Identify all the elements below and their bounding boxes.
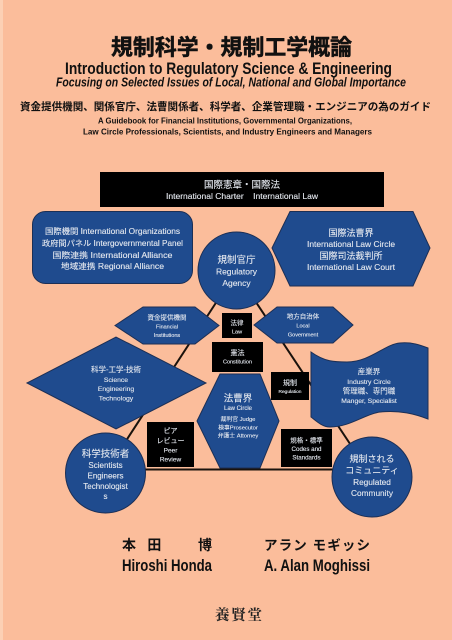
- panel: international charter: 国際憲章・国際法: [204, 179, 280, 191]
- box: regulation: 規制: [283, 378, 297, 387]
- circle: scientists: s: [104, 492, 108, 501]
- circle: regulatory agency: Regulatory: [216, 266, 258, 276]
- connecting triangle lines: [105, 272, 372, 477]
- flag: industry circle: Industry Circle: [347, 379, 391, 386]
- flag: industry circle: 産業界: [358, 366, 381, 376]
- circle: regulated community: Regulated: [353, 477, 391, 487]
- diamond: science engineering technology: [27, 337, 206, 429]
- hexagon: law circle: 検事Prosecutor: [218, 424, 258, 432]
- box: law: 法律: [230, 318, 244, 327]
- author: Hiroshi Honda: 本田 博: [122, 537, 212, 553]
- hexagon: law circle: [197, 374, 279, 468]
- box: codes and standards: Standards: [292, 454, 321, 462]
- publisher: 養賢堂: [215, 606, 262, 624]
- panel: international law circle: International Law Court: [307, 262, 396, 272]
- hexagon: financial institutions: Institutions: [154, 333, 180, 339]
- diamond: science engineering technology: 科学-工学-技術: [91, 364, 141, 374]
- hexagon: local government: Local: [296, 324, 310, 330]
- hexagon: local government: Government: [288, 332, 319, 338]
- box: constitution: Constitution: [223, 360, 252, 366]
- box: codes and standards: 規格・標準: [290, 436, 323, 444]
- title: 規制科学・規制工学概論: [111, 35, 352, 60]
- author: Hiroshi Honda: Hiroshi Honda: [122, 557, 213, 575]
- circle: regulatory agency: [198, 232, 275, 309]
- flag: industry circle: [311, 343, 428, 427]
- circle: regulated community: コミュニティ: [345, 466, 399, 476]
- panel: international charter: International Charter International Law: [166, 191, 319, 201]
- circle: regulatory agency: 規制官庁: [217, 254, 256, 266]
- box: codes and standards: [281, 429, 332, 467]
- circle: scientists: Technologist: [83, 482, 129, 491]
- box: codes and standards: Codes and: [292, 446, 322, 453]
- panel: international organizations: 政府間パネル Intergovernmental Panel: [42, 238, 183, 248]
- subtitle text block: [20, 100, 431, 136]
- circle: scientists: 科学技術者: [82, 448, 129, 460]
- author: Hiroshi Honda: [122, 537, 213, 575]
- box: regulation: [271, 372, 309, 400]
- box: peer review: ピア: [164, 427, 178, 435]
- author: A. Alan Moghissi: アラン モギッシ: [264, 538, 370, 553]
- hexagon: financial institutions: [115, 307, 219, 344]
- panel: international organizations: [32, 212, 192, 284]
- box: peer review: レビュー: [156, 436, 184, 445]
- hexagon: financial institutions: 資金提供機関: [148, 312, 186, 322]
- box: law: [222, 313, 252, 338]
- panel: international law circle: 国際司法裁判所: [319, 250, 383, 261]
- subtitle text block: Law Circle Professionals, Scientists, and Industry Engineers and Managers: [83, 126, 372, 136]
- panel: international law circle: 国際法曹界: [328, 227, 374, 238]
- hexagon: local government: 地方自治体: [287, 312, 320, 320]
- diamond: science engineering technology: Technology: [99, 396, 134, 402]
- subtitle text block: 資金提供機関、関係官庁、法曹関係者、科学者、企業管理職・エンジニアの為のガイド: [20, 100, 431, 113]
- author: A. Alan Moghissi: A. Alan Moghissi: [264, 557, 370, 575]
- hexagon: law circle: 弁護士 Attorney: [218, 432, 258, 440]
- hexagon: local government: [254, 307, 353, 343]
- circle: scientists: Scientists: [88, 461, 123, 470]
- box: constitution: [212, 342, 263, 372]
- box: peer review: Review: [160, 456, 181, 464]
- diamond: science engineering technology: Engineering: [98, 386, 134, 393]
- hexagon: financial institutions: Financial: [156, 324, 178, 330]
- box: law: Law: [232, 330, 242, 336]
- circle: regulated community: 規制される: [349, 453, 395, 464]
- circle: scientists: Engineers: [87, 472, 124, 480]
- panel: international organizations: 国際機関 International Organizations: [45, 226, 180, 236]
- panel: international law circle: International Law Circle: [307, 239, 395, 249]
- panel: international organizations: 地域連携 Regional Alliance: [61, 261, 164, 271]
- hexagon: law circle: 裁判官 Judge: [221, 415, 255, 423]
- diamond: science engineering technology: Science: [104, 377, 128, 384]
- box: peer review: [147, 422, 194, 467]
- author: A. Alan Moghissi: [264, 538, 370, 575]
- circle: regulated community: Community: [351, 488, 394, 498]
- subtitle text block: A Guidebook for Financial Institutions, Governmental Organizations,: [98, 116, 352, 126]
- box: regulation: Regulation: [279, 389, 302, 395]
- box: peer review: Peer: [164, 448, 178, 454]
- flag: industry circle: 管理職、専門職: [343, 386, 396, 396]
- title: [56, 35, 406, 90]
- panel: international charter: [100, 172, 384, 207]
- circle: regulatory agency: Agency: [222, 278, 251, 288]
- panel: international law circle: [272, 212, 430, 286]
- box: constitution: 憲法: [230, 348, 244, 357]
- flag: industry circle: Manger, Specialist: [341, 398, 397, 405]
- panel: international organizations: 国際連携 International Alliance: [52, 250, 172, 260]
- circle: regulated community: [332, 437, 412, 517]
- circle: scientists: [66, 433, 146, 513]
- hexagon: law circle: Law Circle: [224, 406, 253, 412]
- hexagon: law circle: 法曹界: [224, 392, 253, 404]
